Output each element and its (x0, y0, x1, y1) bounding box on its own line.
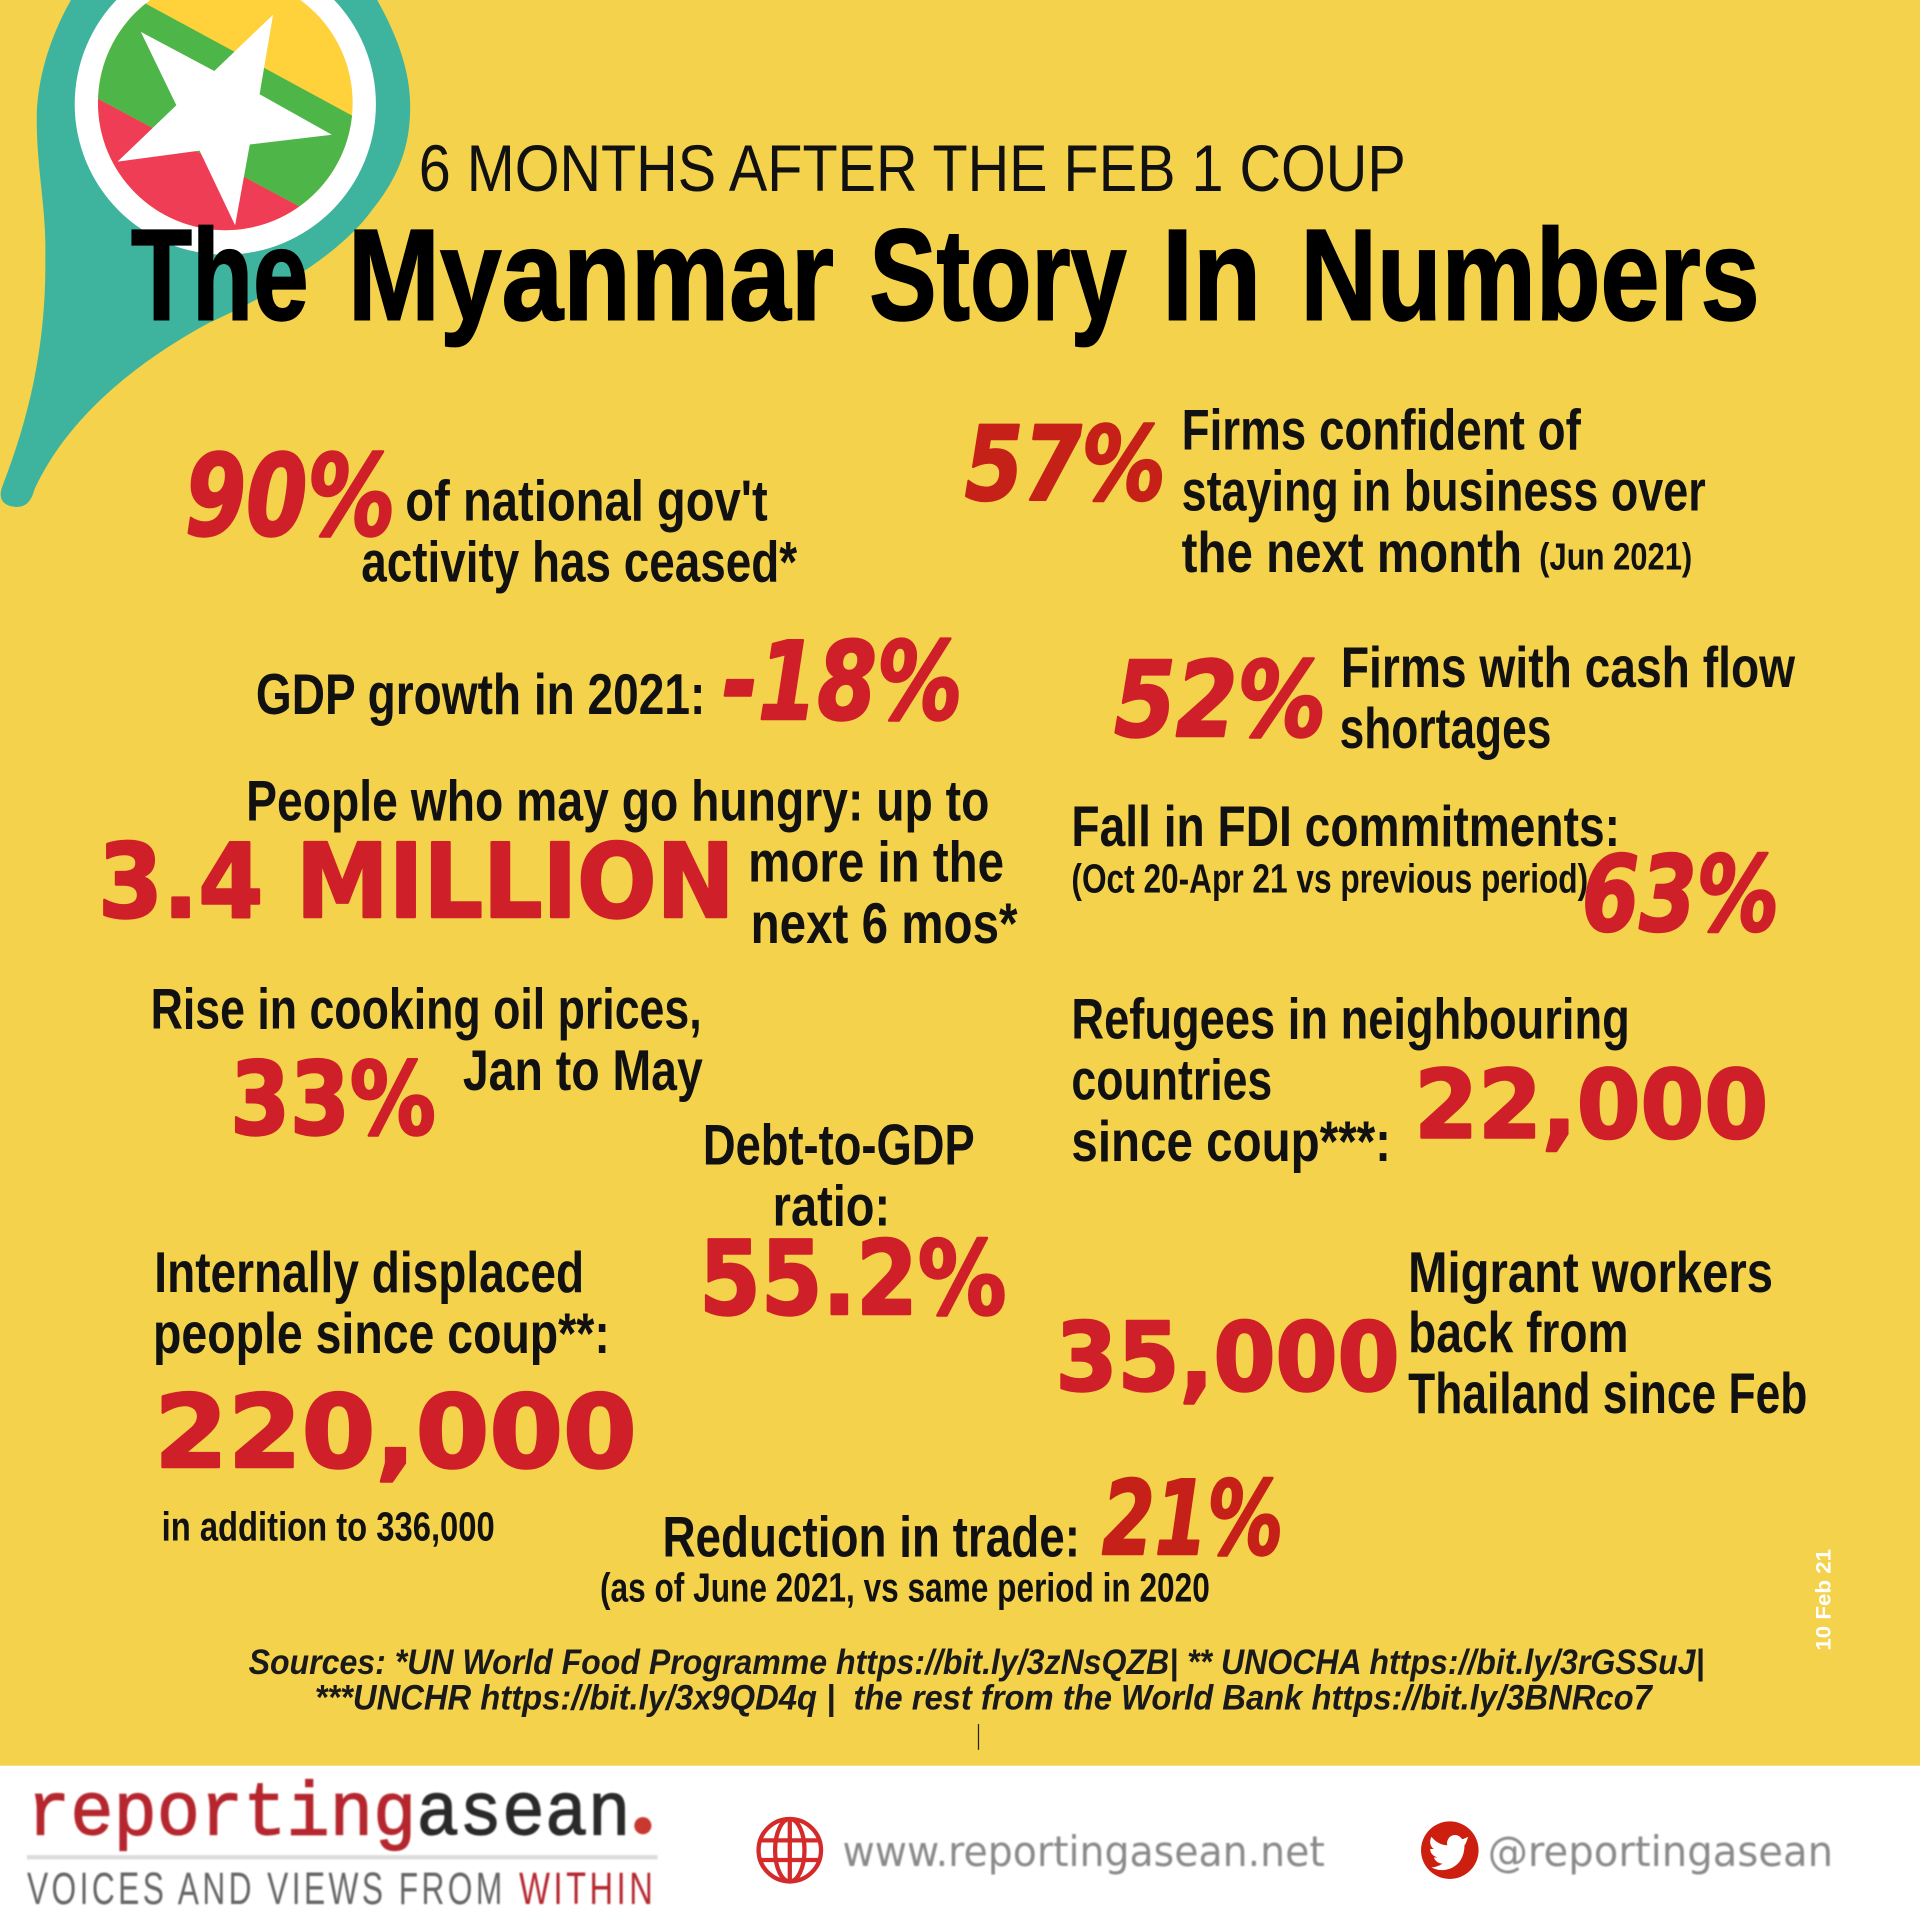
label: hunger: People who may go hungry: up to (246, 769, 989, 833)
stat: firms confident (965, 398, 1706, 585)
figure: 55.2%: 55.2% (699, 1220, 1007, 1339)
logo: reportingasean: VOICES AND VIEWS FROM (27, 1863, 506, 1914)
figure: 63%: 63% (1582, 834, 1779, 956)
stat: internally displaced: people since coup**: (153, 1302, 610, 1366)
twitter handle: @reportingasean (1488, 1827, 1833, 1876)
figure: 3.4 million: 3.4 MILLION (98, 823, 735, 942)
logo: reportingasean (27, 1771, 658, 1914)
logo: reportingasean: asean (416, 1771, 631, 1857)
stat: migrant workers: Thailand since Feb (1408, 1362, 1807, 1426)
stat: cash flow: shortages (1340, 697, 1551, 761)
stat: hunger (98, 769, 1018, 956)
label: refugees: Refugees in neighbouring (1071, 987, 1630, 1051)
website: www.reportingasean.net (842, 1827, 1325, 1876)
label: cash flow: Firms with cash flow (1341, 636, 1795, 700)
stat: refugees: countries (1071, 1049, 1272, 1113)
title: In (1162, 203, 1261, 348)
label: cooking oil: Rise in cooking oil prices, (151, 978, 702, 1042)
title: Story (869, 203, 1127, 348)
stat: GDP growth (256, 620, 962, 745)
title: The (131, 203, 309, 348)
figure: 33%: 33% (230, 1041, 436, 1158)
stat: firms confident: the next month (1182, 521, 1522, 585)
figure: 52%: 52% (1114, 639, 1326, 761)
stat: migrant workers (1056, 1241, 1807, 1426)
title: Numbers (1300, 203, 1760, 348)
stat: cooking oil (151, 978, 703, 1158)
sources (249, 1642, 1704, 1750)
figure: 35,000: 35,000 (1056, 1303, 1400, 1413)
stat: debt to GDP (699, 1113, 1007, 1339)
label: cooking oil period: Jan to May (463, 1039, 703, 1103)
note: FDI period: (Oct 20-Apr 21 vs previous period) (1071, 856, 1588, 902)
title: Myanmar (348, 203, 834, 348)
stat: refugees: since coup***: (1071, 1110, 1391, 1174)
stat: refugees (1071, 987, 1768, 1174)
note: in addition: in addition to 336,000 (162, 1503, 495, 1549)
label: government activity: of national gov't (405, 469, 768, 533)
stat: government activity: activity has ceased* (361, 531, 798, 595)
title (131, 203, 1760, 348)
stat: cash flow (1114, 636, 1795, 761)
figure: 21%: 21% (1102, 1460, 1283, 1579)
figure: -18%: -18% (722, 620, 962, 745)
label: GDP growth: GDP growth in 2021: (256, 663, 705, 727)
label: hunger continued: more in the (748, 831, 1004, 895)
stat: FDI (1071, 795, 1779, 956)
subtitle: 6 MONTHS AFTER THE FEB 1 COUP (419, 132, 1406, 206)
label: firms confident: Firms confident of (1182, 398, 1581, 462)
sources: Sources: *UN World Food Programme https://bit.ly/3zNsQZB| ** UNOCHA https://bit.ly/3rGSSuJ| (249, 1642, 1704, 1682)
label: debt to GDP: Debt-to-GDP (703, 1113, 975, 1177)
figure: 220,000: 220,000 (154, 1374, 637, 1491)
logo: reportingasean: WITHIN (519, 1863, 656, 1914)
sources: ***UNCHR https://bit.ly/3x9QD4q | the rest from the World Bank https://bit.ly/3BNRco7 (315, 1677, 1654, 1717)
figure: 90%: 90% (185, 430, 396, 562)
stat: internally displaced (153, 1241, 637, 1549)
icon: twitter (1421, 1821, 1479, 1879)
stat: government activity (185, 430, 798, 595)
label: trade: Reduction in trade: (662, 1505, 1080, 1569)
stat: firms confident: staying in business over (1182, 460, 1706, 524)
logo: reportingasean: reporting (27, 1771, 416, 1857)
icon: map pin with Myanmar flag (1, 0, 410, 507)
label: migrant workers: Migrant workers (1408, 1241, 1773, 1305)
stat: debt to GDP: ratio: (773, 1175, 890, 1239)
note: trade period: (as of June 2021, vs same period in 2020 (600, 1565, 1210, 1611)
figure: 22,000: 22,000 (1414, 1051, 1768, 1161)
stat: firms confident: (Jun 2021) (1539, 536, 1692, 578)
stat: trade (600, 1460, 1283, 1611)
footer band (0, 1766, 1920, 1920)
figure: 57%: 57% (965, 406, 1166, 525)
stat: hunger: next 6 mos* (751, 892, 1018, 956)
stat: migrant workers: back from (1408, 1301, 1629, 1365)
date stamp: 10 Feb 21 (1813, 1549, 1836, 1651)
icon: globe (759, 1818, 821, 1882)
label: FDI: Fall in FDI commitments: (1071, 795, 1620, 859)
label: internally displaced: Internally displaced (154, 1241, 584, 1305)
